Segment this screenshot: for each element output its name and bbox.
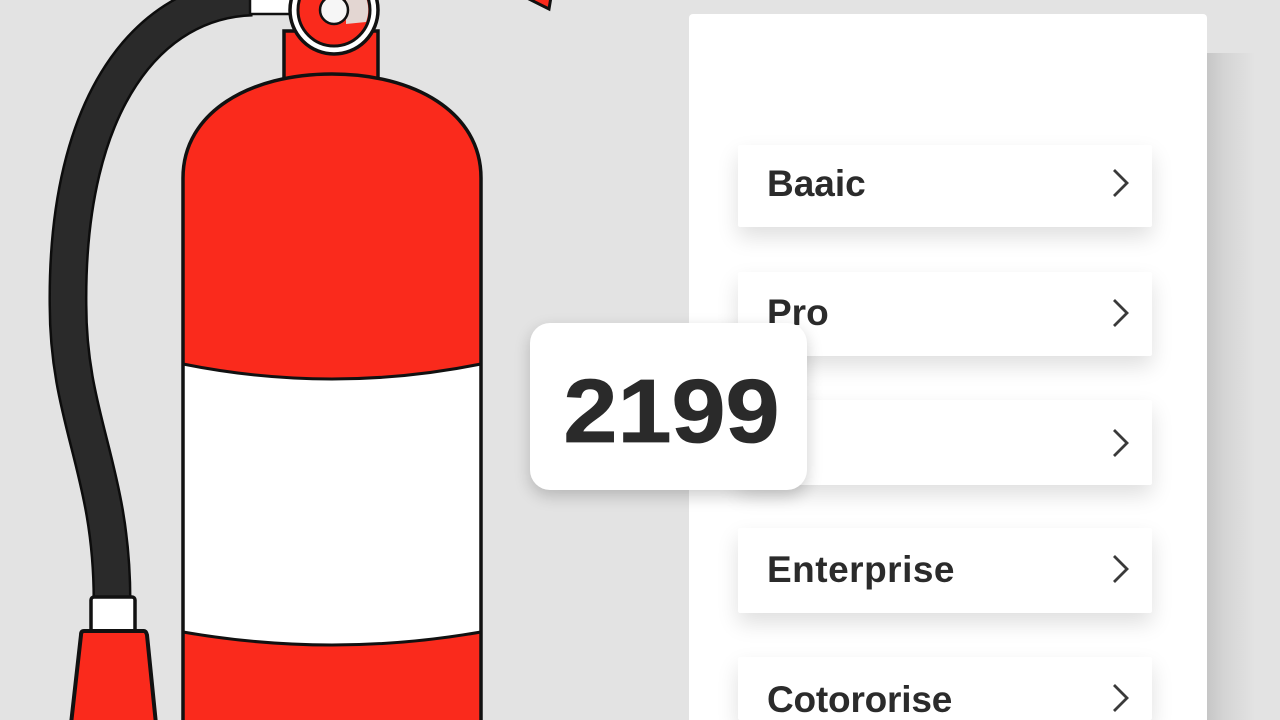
- valve neck: [284, 31, 378, 79]
- row: Cotororise: Cotororise: [767, 679, 952, 720]
- row: empty: [738, 400, 1152, 485]
- row: Pro: [738, 272, 1152, 356]
- row: Basic: Baaic: [767, 163, 866, 204]
- row: Enterprise: [738, 528, 1152, 613]
- hose nozzle cone: [71, 631, 156, 720]
- row: Pro: Pro: [767, 292, 829, 333]
- row: Basic: [738, 145, 1152, 227]
- panel shadow: [1207, 53, 1255, 720]
- white band: [183, 364, 481, 645]
- row: Cotororise: [738, 657, 1152, 720]
- illustration: fire extinguisher: [48, 0, 552, 720]
- hose connector top: [250, 0, 292, 14]
- row: Enterprise: Enterprise: [767, 549, 955, 590]
- callout: 2199: 2199: [563, 362, 780, 462]
- cylinder body: [183, 74, 481, 720]
- hose nozzle collar: [91, 597, 135, 633]
- panel: plan list: [689, 14, 1207, 720]
- callout: 2199: [530, 323, 807, 490]
- hose: [68, 0, 252, 600]
- gauge: [290, 0, 378, 54]
- handle tip: [525, 0, 551, 9]
